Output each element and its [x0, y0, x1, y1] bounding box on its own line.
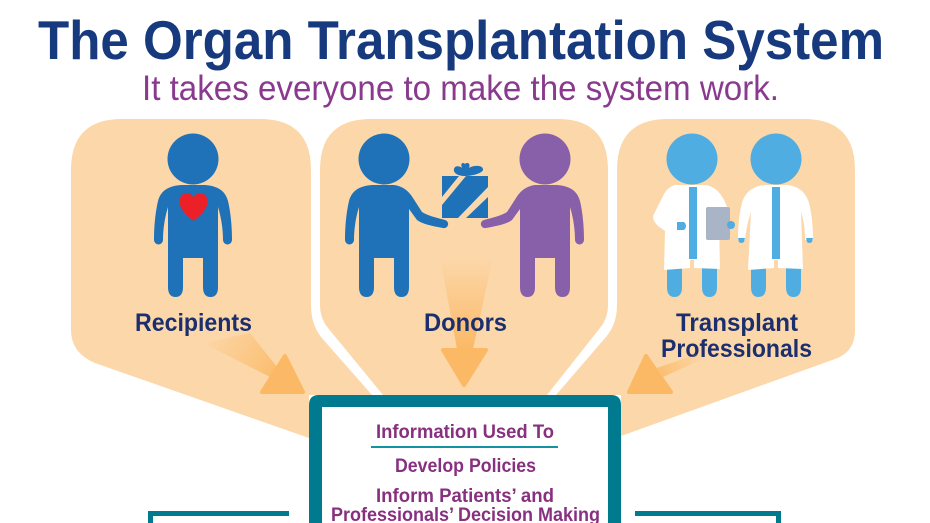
- arrow: donors to information box: [440, 257, 493, 385]
- icon: professional with clipboard: [653, 134, 735, 297]
- text: develop policies: Develop Policies: [395, 456, 536, 477]
- icon: gift box: [442, 163, 488, 218]
- information box interior: [322, 407, 608, 523]
- information box frame: [309, 395, 621, 523]
- subtitle: It takes everyone to make the system work.: [142, 69, 779, 108]
- panel: donors: [320, 119, 608, 395]
- icon: donor figure, purple: [481, 134, 584, 297]
- arrow: professionals to information box: [629, 353, 705, 392]
- panel background: recipients: [71, 119, 372, 438]
- label: donors: Donors: [424, 309, 507, 337]
- panel background: donors: [320, 119, 608, 395]
- label: transplant professionals: Transplant: [676, 309, 799, 337]
- panel background: professionals: [556, 119, 855, 436]
- icon: professional in coat: [738, 134, 813, 297]
- text: inform decision making: [331, 486, 600, 523]
- label: transplant professionals: [661, 309, 812, 363]
- label: transplant professionals: Professionals: [661, 335, 812, 363]
- panel: transplant professionals: [556, 119, 855, 436]
- panel: information box: [309, 395, 621, 523]
- text: inform decision making: Inform Patients’ and: [376, 486, 554, 507]
- icon: heart: [180, 193, 208, 221]
- lower left teal frame: [150, 514, 289, 523]
- label: recipients: Recipients: [135, 309, 252, 337]
- heading: information used to: Information Used To: [376, 422, 554, 443]
- heading underline: [371, 446, 558, 448]
- panel: recipients: [71, 119, 372, 438]
- arrow: recipients to information box: [203, 333, 303, 392]
- icon: donor figure, blue: [345, 134, 448, 297]
- icon: recipient figure: [154, 134, 232, 297]
- lower right teal frame: [635, 514, 778, 523]
- title: The Organ Transplantation System: [38, 9, 884, 71]
